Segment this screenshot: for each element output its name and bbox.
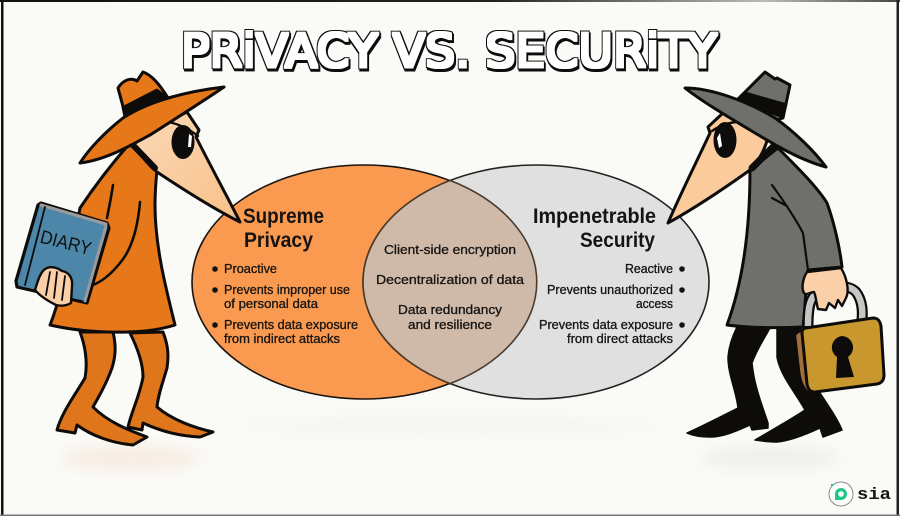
character: privacy spy in orange: [16, 72, 240, 445]
face: [668, 113, 768, 223]
heading: impenetrable security: Impenetrable: [533, 205, 656, 228]
coat: [50, 143, 175, 332]
face: [131, 112, 240, 222]
hat brim: [80, 87, 224, 163]
hand: [35, 267, 72, 306]
list: privacy features: of personal data: [224, 297, 318, 311]
keyhole: [832, 336, 854, 378]
eye: [172, 125, 194, 159]
coat: [727, 148, 842, 328]
heading: supreme privacy: Privacy: [244, 229, 313, 252]
character: security spy in gray: [668, 72, 884, 442]
hat brim: [685, 88, 826, 167]
heading: supreme privacy: Supreme: [243, 205, 324, 228]
hat crown: [118, 72, 168, 125]
list: security features: [539, 262, 685, 346]
lock side: [795, 330, 815, 392]
list: privacy features: Proactive: [224, 262, 277, 276]
hat crown: [740, 72, 790, 125]
heading: supreme privacy: [243, 205, 324, 252]
legs: [57, 332, 213, 445]
list: privacy features: [212, 262, 358, 346]
list: security features: Reactive: [625, 262, 673, 276]
logo: sia: sia: [857, 486, 891, 505]
list: privacy features: Prevents data exposure: [224, 318, 358, 332]
heading: impenetrable security: Security: [580, 229, 655, 252]
list: shared features: and resilience: [408, 318, 492, 332]
list: shared features: Client-side encryption: [384, 243, 516, 257]
overlap right boundary: [449, 180, 537, 384]
circle: security: [363, 165, 709, 399]
list: shared features: Decentralization of data: [376, 273, 524, 287]
hat band: [735, 92, 787, 118]
padlock: [795, 287, 884, 392]
list: privacy features: from indirect attacks: [224, 332, 340, 346]
hand: [803, 268, 848, 310]
book: [16, 203, 109, 303]
venn diagram: [192, 165, 709, 399]
list: shared features: Data redundancy: [398, 303, 503, 317]
title: PRiVACY VS. SECURiTY: [181, 24, 718, 78]
hat band: [122, 89, 168, 122]
list: security features: access: [636, 297, 673, 311]
shackle: [808, 287, 862, 326]
list: security features: Prevents unauthorized: [547, 283, 673, 297]
heading: impenetrable security: [533, 205, 656, 252]
list: shared features: [376, 243, 524, 332]
circle: privacy: [192, 165, 536, 399]
list: security features: Prevents data exposure: [539, 318, 673, 332]
overlap region: [362, 180, 536, 384]
eye: [714, 122, 736, 158]
list: security features: from direct attacks: [567, 332, 673, 346]
list: privacy features: Prevents improper use: [224, 283, 350, 297]
logo: sia: [829, 482, 891, 506]
book label: DIARY: [38, 227, 94, 260]
legs: [687, 327, 842, 442]
lock body: [802, 318, 884, 392]
